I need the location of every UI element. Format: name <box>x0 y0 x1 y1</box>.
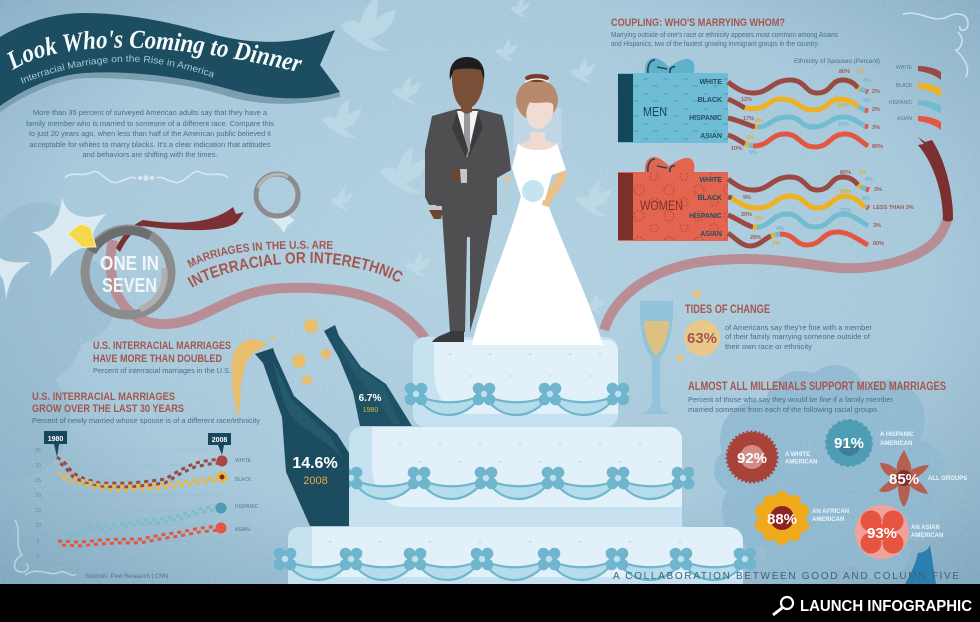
percent labels: women: 7% <box>772 241 780 247</box>
flag: 1980 <box>44 431 67 457</box>
line: hispanic <box>58 505 221 542</box>
legend: BLACK <box>896 83 913 89</box>
line: asian <box>58 526 221 546</box>
curved heading: marriages in the US: MARRIAGES IN THE U.S. ARE <box>186 240 333 268</box>
flag: 2008 <box>208 433 231 455</box>
heading: grow over 30 years: Percent of newly married whose spouse is of a different race/ethnicity <box>32 418 261 425</box>
percent labels: men <box>731 69 883 156</box>
small ring <box>256 174 298 216</box>
one in seven text: ONE IN <box>100 253 159 275</box>
percent labels: men: 12% <box>741 97 752 103</box>
percent labels: women: 75% <box>840 208 851 214</box>
y axis labels: 0 <box>36 554 40 560</box>
intro paragraph: acceptable for whites to marry blacks. It's a clear indication that attitudes <box>30 142 271 149</box>
bottom tier <box>274 527 756 584</box>
y axis labels: 25 <box>35 478 41 484</box>
legend: HISPANIC <box>889 100 913 106</box>
percent labels: women: 60% <box>873 241 884 247</box>
series labels: WHITE <box>235 458 252 464</box>
champagne glass <box>640 301 673 414</box>
y axis labels: 35 <box>35 448 41 454</box>
heading: have more than doubled <box>93 340 231 375</box>
flourish corner top right <box>903 13 968 77</box>
percent labels: men: 5% <box>746 135 754 141</box>
neck and chest <box>520 132 556 150</box>
heading: grow over 30 years: GROW OVER THE LAST 30 YEARS <box>32 403 184 415</box>
percent labels: women: 9% <box>743 195 751 201</box>
panel: millennials heading: married someone from each of the following racial groups <box>688 407 878 414</box>
intro paragraph: to just 20 years ago, when less than half of the American public believed it <box>29 131 271 138</box>
icon: magnifier <box>773 597 793 615</box>
percent labels: women: LESS THAN 3% <box>873 205 914 211</box>
gift: women: BLACK <box>698 195 722 202</box>
heading: grow over 30 years: U.S. INTERRACIAL MARRIAGES <box>32 391 175 403</box>
tree trunk <box>905 545 936 584</box>
bottle 2008: 14.6% <box>292 455 338 472</box>
sparkle stars <box>0 197 295 300</box>
badge: 93% asian american: AN ASIAN <box>911 525 940 531</box>
badge: 91% hispanic american <box>826 420 915 466</box>
end markers <box>216 456 228 534</box>
groom jacket <box>425 109 511 215</box>
groom shoe <box>432 331 464 342</box>
bottle 1980 <box>324 325 412 426</box>
wedding cake <box>274 337 756 584</box>
groom hair <box>450 57 484 80</box>
bottle 1980: 6.7% <box>359 393 382 404</box>
bride hair <box>516 79 558 121</box>
flag: 2008: 2008 <box>212 437 227 444</box>
chart caption: Ethnicity of Spouses (Percent) <box>794 58 880 65</box>
flourish corner bottom left <box>14 520 76 575</box>
heading: have more than doubled: HAVE MORE THAN DOUBLED <box>93 353 222 365</box>
one in seven text: SEVEN <box>102 275 157 297</box>
gift: men: WHITE <box>699 79 722 86</box>
gift: women <box>618 157 728 241</box>
heading: have more than doubled: Percent of interracial marriages in the U.S. <box>93 368 231 375</box>
percent labels: women: 4% <box>865 177 873 183</box>
panel: tides of change: their own race or ethnicity <box>725 344 813 351</box>
gift: men: MEN <box>643 104 667 119</box>
y axis labels: 5 <box>36 539 40 545</box>
curved heading: marriages in the US: INTERRACIAL OR INTERETHNIC <box>187 252 402 288</box>
line: white <box>57 457 221 487</box>
percent labels: women: 20% <box>741 212 752 218</box>
groom head <box>452 57 484 114</box>
percent labels: men: 2% <box>872 89 880 95</box>
series labels: BLACK <box>235 477 252 483</box>
y axis labels: 15 <box>35 508 41 514</box>
maroon ribbon tail <box>918 137 953 222</box>
top tier <box>405 337 629 427</box>
badge: 88% african american <box>755 491 849 545</box>
credit: A COLLABORATION BETWEEN GOOD AND COLUMN FIVE <box>613 571 959 582</box>
percent labels: men: 76% <box>838 122 849 128</box>
bride <box>472 74 603 345</box>
flourish divider <box>65 171 228 183</box>
panel: tides of change: of Americans say they're fine with a member <box>725 325 873 332</box>
groom hands <box>429 169 463 219</box>
launch button text: LAUNCH INFOGRAPHIC <box>800 598 972 615</box>
series labels: ASIAN <box>235 527 250 533</box>
panel: tides of change: TIDES OF CHANGE <box>685 304 770 316</box>
gift: men: ASIAN <box>700 133 722 140</box>
gift: women: ASIAN <box>700 231 722 238</box>
intro paragraph: and behaviors are shifting with the times. <box>82 152 218 159</box>
percent labels: women: 29% <box>750 235 761 241</box>
line: black <box>58 473 221 490</box>
badge: 85% all groups: 85% <box>889 471 919 488</box>
badge: 88% african american: 88% <box>767 511 797 528</box>
heading: have more than doubled: U.S. INTERRACIAL MARRIAGES <box>93 340 231 352</box>
percent labels: women: 3% <box>874 187 882 193</box>
percent labels: men: 80% <box>838 103 849 109</box>
percent labels: men: 80% <box>839 69 850 75</box>
wave chart: men <box>728 80 868 147</box>
panel: millennials heading: Percent of those who say they would be fine if a family member <box>688 397 894 404</box>
pink ribbon across the page <box>111 205 948 338</box>
heading: grow over 30 years <box>32 391 261 425</box>
percent labels: men: 10% <box>731 146 742 152</box>
panel: millennials heading <box>688 381 946 414</box>
percent labels: men: 80% <box>872 144 883 150</box>
banner title <box>0 13 340 112</box>
bride arm <box>504 172 567 207</box>
badge: 91% hispanic american: A HISPANIC <box>880 432 915 438</box>
percent labels: women: 80% <box>840 189 851 195</box>
badge: 91% hispanic american: AMERICAN <box>880 441 912 447</box>
wave chart: women <box>728 177 869 246</box>
percent labels: men: 4% <box>863 78 871 84</box>
flag: 1980: 1980 <box>48 436 63 443</box>
badge: 88% african american: AMERICAN <box>812 517 844 523</box>
gift: men: HISPANIC <box>689 115 722 122</box>
gift: men: BLACK <box>698 97 722 104</box>
decorative doves <box>322 0 611 313</box>
percent labels: women: 80% <box>840 170 851 176</box>
panel: tides of change: of their family marrying someone outside of <box>725 334 870 341</box>
black footer bar <box>0 584 980 622</box>
percent labels: men: 5% <box>749 150 757 156</box>
percent labels: women: 7% <box>858 170 866 176</box>
shirt and tie <box>457 111 478 158</box>
gift: women: WOMEN <box>640 197 683 213</box>
percent labels: women: 2% <box>755 216 763 222</box>
percent labels: women: 4% <box>776 226 784 232</box>
stat circle 63% <box>684 320 720 356</box>
badge: 92% white american: A WHITE <box>785 452 810 458</box>
one in seven text <box>100 253 159 297</box>
gift: men <box>618 58 728 143</box>
line chart <box>35 431 259 560</box>
subtitle: Interracial Marriage on the Rise in America <box>20 54 214 84</box>
gift: women: HISPANIC <box>689 213 722 220</box>
panel: coupling heading: Marrying outside of one's race or ethnicity appears most common among Asians <box>611 32 838 39</box>
panel: coupling heading: COUPLING: WHO'S MARRYING WHOM? <box>611 17 785 29</box>
badge: 92% white american: 92% <box>737 450 767 467</box>
panel: tides of change <box>676 290 873 362</box>
bride bodice <box>512 143 566 200</box>
badge: 92% white american: AMERICAN <box>785 460 817 466</box>
y axis labels: 20 <box>35 493 41 499</box>
series labels: HISPANIC <box>235 504 259 510</box>
percent labels: men: 2% <box>872 107 880 113</box>
series labels <box>235 458 259 533</box>
icon: diamond <box>68 224 96 247</box>
percent labels: women <box>741 170 914 247</box>
champagne splash and bubbles <box>232 319 331 417</box>
percent labels: men: 2% <box>755 118 763 124</box>
bride skirt <box>472 196 603 345</box>
badge: 85% all groups: ALL GROUPS <box>928 476 967 482</box>
title text: Look Who's Coming to Dinner <box>6 30 302 71</box>
badge: 93% asian american <box>855 505 943 559</box>
bouquet <box>522 180 544 202</box>
badge: 93% asian american: AMERICAN <box>911 533 943 539</box>
panel: coupling heading <box>611 17 838 48</box>
badge: 91% hispanic american: 91% <box>834 435 864 452</box>
bottle 1980: 1980 <box>363 407 378 414</box>
groom <box>425 57 511 342</box>
panel: coupling heading: and Hispanics, two of the fastest growing immigrant groups in the country. <box>611 41 819 48</box>
badge: 88% african american: AN AFRICAN <box>812 509 849 515</box>
gift: women: WHITE <box>699 177 722 184</box>
maroon ribbon near ring <box>116 207 244 252</box>
percent labels: men: 3% <box>872 125 880 131</box>
badge: 92% white american <box>727 432 817 482</box>
legend: WHITE <box>896 65 913 71</box>
stat circle 63%: 63% <box>687 330 717 347</box>
percent labels: men: 5% <box>857 69 865 75</box>
ring with text One in Seven <box>68 224 171 315</box>
intro paragraph <box>26 110 275 159</box>
veil <box>513 108 562 150</box>
bottle 2008: 2008 <box>303 475 328 487</box>
groom legs <box>442 212 493 332</box>
badge: 93% asian american: 93% <box>867 525 897 542</box>
bottle 2008 <box>255 348 349 526</box>
percent labels: men: 17% <box>743 116 754 122</box>
y axis labels <box>35 448 41 560</box>
source: Sources: Pew Research | CNN <box>85 574 168 580</box>
legend <box>889 65 941 130</box>
percent labels: women: 3% <box>873 223 881 229</box>
intro paragraph: More than 35 percent of surveyed American adults say that they have a <box>33 110 267 117</box>
y axis labels: 10 <box>35 523 41 529</box>
y axis labels: 30 <box>35 463 41 469</box>
middle tier <box>340 427 694 537</box>
percent labels: men: 4% <box>863 98 871 104</box>
legend: ASIAN <box>897 116 912 122</box>
bride face <box>526 102 553 129</box>
badge: 85% all groups <box>879 450 967 507</box>
percent labels: women: 4% <box>862 196 870 202</box>
intro paragraph: family member who is married to someone of a different race. Compare this <box>26 121 275 128</box>
